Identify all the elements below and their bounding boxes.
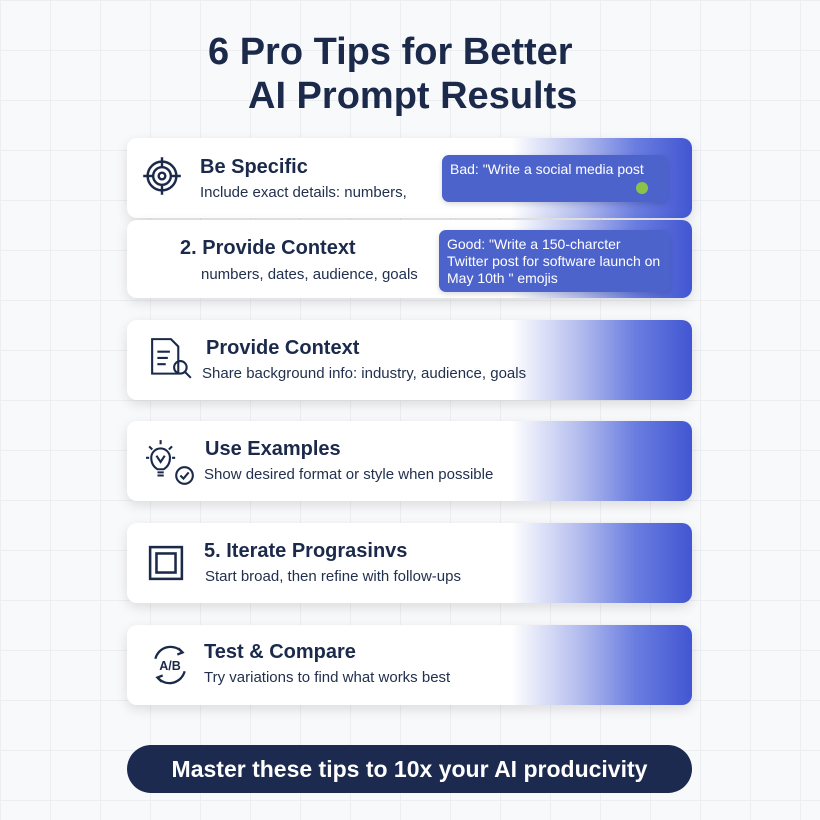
card 4: use examples — [127, 421, 692, 501]
icon: A/B cycle: A/B — [159, 659, 181, 673]
card 1: be specific — [127, 138, 692, 218]
footer banner: Master these tips to 10x your AI producivity — [172, 756, 647, 782]
icon: document search — [151, 338, 192, 378]
title — [208, 31, 577, 117]
text: Show desired format or style when possible — [204, 466, 493, 483]
heading: Be Specific — [200, 156, 308, 178]
icon: square — [148, 546, 184, 580]
footer banner — [127, 745, 692, 793]
heading: Test & Compare — [204, 641, 356, 663]
heading: 2. Provide Context — [180, 237, 356, 259]
bad example box: Bad: "Write a social media post — [450, 161, 644, 177]
card 3: provide context — [127, 320, 692, 400]
card 2: provide context — [127, 220, 692, 298]
text: Share background info: industry, audience, goals — [202, 365, 526, 382]
card 6: test & compare — [127, 625, 692, 705]
title: AI Prompt Results — [248, 75, 577, 117]
text: Start broad, then refine with follow-ups — [205, 568, 461, 585]
text: Try variations to find what works best — [204, 669, 450, 686]
text: numbers, dates, audience, goals — [201, 266, 418, 283]
good example box: Good: "Write a 150-charcter Twitter post for software launch on May 10th " emojis — [447, 236, 660, 286]
card 5: iterate — [127, 523, 692, 603]
title: 6 Pro Tips for Better — [208, 31, 573, 73]
icon: A/B cycle — [154, 646, 186, 684]
icon: target — [143, 157, 181, 195]
heading: Use Examples — [205, 438, 341, 460]
heading: 5. Iterate Prograsinvs — [204, 540, 407, 562]
heading: Provide Context — [206, 337, 359, 359]
icon: lightbulb check — [146, 440, 194, 485]
text: Include exact details: numbers, — [200, 184, 407, 201]
bad example box — [442, 155, 668, 202]
